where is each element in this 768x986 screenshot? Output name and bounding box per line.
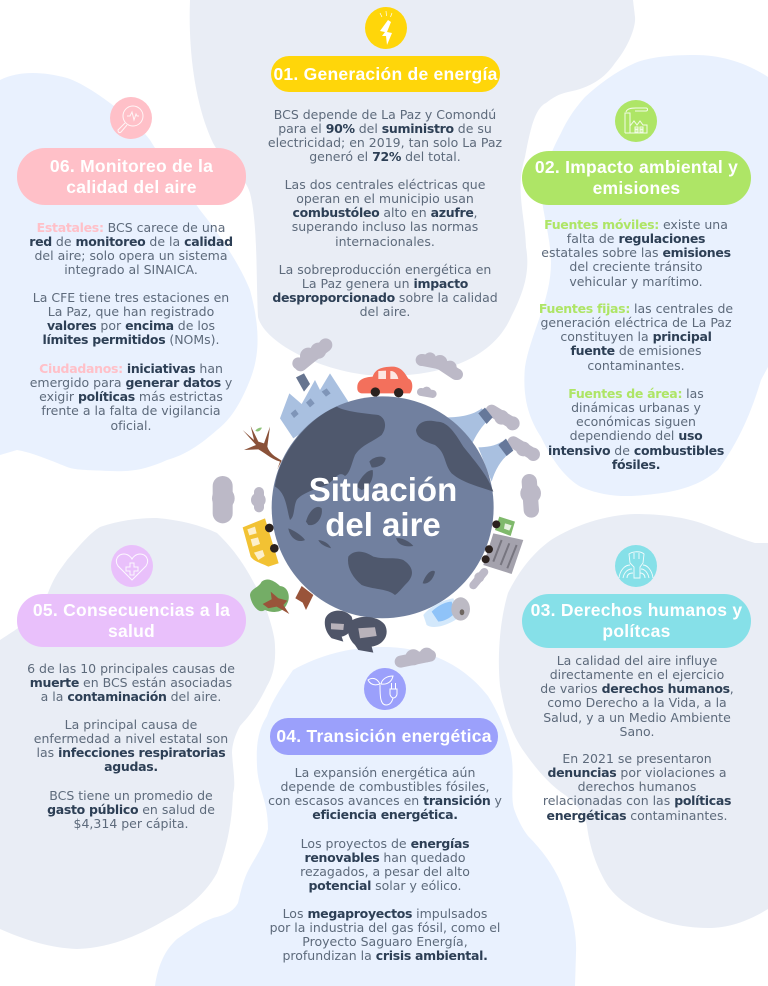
text 02: Fuentes móviles: existe una xyxy=(544,217,728,232)
title: Situación del aire: Situación xyxy=(309,471,457,508)
icon: truck xyxy=(482,517,523,574)
text: intensivo de combustibles xyxy=(548,443,724,458)
heading 02 xyxy=(522,151,751,205)
text 02: del creciente tránsito xyxy=(569,259,703,274)
text 05: a la contaminación del aire. xyxy=(41,689,221,704)
text: combustóleo alto en azufre, xyxy=(292,205,478,220)
heading 03: 03. Derechos humanos y xyxy=(531,600,742,620)
panel: 02 impacto ambiental xyxy=(522,100,751,472)
text: derechos humanos xyxy=(578,779,696,794)
panel: 04 transición energética xyxy=(268,668,502,963)
text: La sobreproducción energética en xyxy=(279,262,491,277)
panel: 06 monitoreo xyxy=(17,97,246,433)
text 06 xyxy=(29,220,233,277)
text: del aire. xyxy=(360,304,410,319)
text 06: del aire; solo opera un sistema xyxy=(34,248,228,263)
heading 06: calidad del aire xyxy=(66,176,197,196)
heading 05 xyxy=(17,594,246,647)
text: generación eléctrica de La Paz xyxy=(540,315,732,330)
heading 05: 05. Consecuencias a la xyxy=(33,600,230,620)
text: fósiles. xyxy=(612,457,660,472)
heading 06 xyxy=(17,148,246,205)
icon: heart xyxy=(111,545,153,587)
text: Fuentes de área: las xyxy=(568,386,704,401)
text: denuncias por violaciones a xyxy=(547,765,727,780)
icon: raised fist xyxy=(615,545,657,587)
panel: 01 generación de energía xyxy=(268,7,502,319)
continents xyxy=(275,407,493,595)
text 01: para el 90% del suministro de su xyxy=(278,121,492,136)
text: límites permitidos (NOMs). xyxy=(42,332,220,347)
text: La CFE tiene tres estaciones en xyxy=(33,290,229,305)
text: exigir políticas más estrictas xyxy=(39,389,223,404)
text: dependiendo del uso xyxy=(570,428,702,443)
text: enfermedad a nivel estatal son xyxy=(34,731,228,746)
text: La Paz genera un impacto xyxy=(302,276,468,291)
text: En 2021 se presentaron xyxy=(562,751,712,766)
text: emergido para generar datos y xyxy=(30,375,232,390)
heading 01: 01. Generación de energía xyxy=(273,64,498,84)
heading 04: 04. Transición energética xyxy=(276,726,492,746)
text 04: depende de combustibles fósiles, xyxy=(280,779,490,794)
text: gasto público en salud de xyxy=(47,802,215,817)
heading 06: 06. Monitoreo de la xyxy=(50,156,213,176)
text 02 xyxy=(541,217,731,289)
panel: 03 derechos humanos xyxy=(522,545,751,823)
heading 03: polítcas xyxy=(602,621,671,641)
text 06: integrado al SINAICA. xyxy=(64,262,198,277)
text 04: eficiencia energética. xyxy=(312,807,458,822)
title: Situación del aire xyxy=(309,471,457,543)
text: fuente de emisiones xyxy=(570,343,702,358)
text: La principal causa de xyxy=(65,717,197,732)
icon: car xyxy=(357,367,412,397)
text: Las dos centrales eléctricas que xyxy=(285,177,485,192)
panel: 05 consecuencias xyxy=(17,545,246,831)
text: económicas siguen xyxy=(576,414,696,429)
text: valores por encima de los xyxy=(47,318,215,333)
icon: smoke clouds xyxy=(212,338,541,665)
text: $4,314 per cápita. xyxy=(74,816,188,831)
text: La Paz, que han registrado xyxy=(48,304,214,319)
heading 03 xyxy=(522,594,751,648)
icon: yellow building xyxy=(243,518,279,567)
heading 04 xyxy=(270,718,498,755)
text 04: con escasos avances en transición y xyxy=(268,793,502,808)
text 03: directamente en el ejercicio xyxy=(550,667,724,682)
text: constituyen la principal xyxy=(560,329,712,344)
text: frente a la falta de vigilancia xyxy=(41,403,221,418)
title: Situación del aire: del aire xyxy=(325,506,441,543)
text: profundizan la crisis ambiental. xyxy=(282,948,488,963)
icon: lightning xyxy=(365,7,407,49)
heading 01 xyxy=(271,56,500,92)
text 01: BCS depende de La Paz y Comondú xyxy=(274,107,496,122)
heading 02: emisiones xyxy=(593,178,680,198)
icon: dead tree xyxy=(243,426,282,469)
text: desproporcionado sobre la calidad xyxy=(272,290,498,305)
heading 02: 02. Impacto ambiental y xyxy=(535,157,738,177)
icon: chimneys xyxy=(447,408,513,482)
text: energéticas contaminantes. xyxy=(547,808,727,823)
text 04: La expansión energética aún xyxy=(295,765,475,780)
text 03 xyxy=(540,653,734,739)
text: Proyecto Saguaro Energía, xyxy=(302,934,468,949)
icon: water and pipe xyxy=(423,597,470,627)
icon: factory xyxy=(280,373,348,438)
icon: factory outline xyxy=(615,100,657,142)
text 05: muerte en BCS están asociadas xyxy=(30,675,232,690)
text 06: red de monitoreo de la calidad xyxy=(29,234,233,249)
text 02: falta de regulaciones xyxy=(567,231,705,246)
text: superando incluso las normas xyxy=(292,219,478,234)
text: potencial solar y eólico. xyxy=(309,878,461,893)
text 01: generó el 72% del total. xyxy=(309,149,461,164)
text: Los megaproyectos impulsados xyxy=(283,906,487,921)
text 04 xyxy=(268,765,502,822)
icon: magnifier xyxy=(110,97,152,139)
icon: gas masks xyxy=(325,611,387,653)
text 03: Salud, y a un Medio Ambiente xyxy=(543,710,731,725)
heading 05: salud xyxy=(108,620,155,640)
text: renovables han quedado xyxy=(304,850,466,865)
text 05: 6 de las 10 principales causas de xyxy=(27,661,235,676)
text: contaminantes. xyxy=(587,358,685,373)
text 03: como Derecho a la Vida, a la xyxy=(547,695,727,710)
text 05 xyxy=(27,661,235,704)
text: dinámicas urbanas y xyxy=(571,400,701,415)
text: oficial. xyxy=(110,418,151,433)
text: relacionadas con las políticas xyxy=(543,793,731,808)
text 03: La calidad del aire influye xyxy=(557,653,717,668)
text: internacionales. xyxy=(335,234,435,249)
globe xyxy=(272,396,494,618)
icon: plant plug xyxy=(364,668,406,710)
text: las infecciones respiratorias xyxy=(37,745,225,760)
icon: green bush and stump xyxy=(250,580,313,614)
text 02: estatales sobre las emisiones xyxy=(541,245,731,260)
text: agudas. xyxy=(104,759,158,774)
text: Ciudadanos: iniciativas han xyxy=(39,361,223,376)
text: BCS tiene un promedio de xyxy=(49,788,213,803)
text 03: de varios derechos humanos, xyxy=(540,681,734,696)
text 01 xyxy=(268,107,502,164)
text: rezagados, a pesar del alto xyxy=(300,864,470,879)
text: Los proyectos de energías xyxy=(301,836,469,851)
text: operan en el municipio usan xyxy=(296,191,474,206)
text 02: vehicular y marítimo. xyxy=(569,274,703,289)
text 03: Sano. xyxy=(620,724,654,739)
text: Fuentes fijas: las centrales de xyxy=(539,301,733,316)
text 01: electricidad; en 2019, tan solo La Paz xyxy=(268,135,502,150)
text 06: Estatales: BCS carece de una xyxy=(37,220,225,235)
text: por la industria del gas fósil, como el xyxy=(270,920,500,935)
